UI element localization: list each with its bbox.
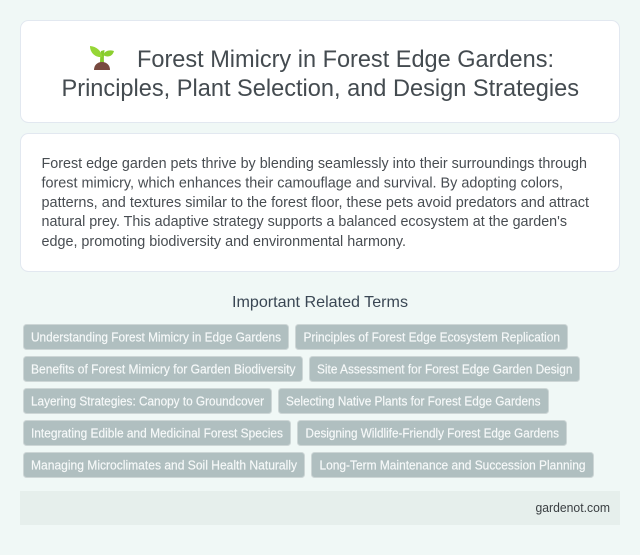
text block: description: natural prey. This adaptive strategy supports a balanced ecosystem at the garden's: [42, 214, 567, 230]
chip: site assessment: Site Assessment for Forest Edge Garden Design: [317, 362, 572, 376]
chip: layering: [24, 388, 272, 414]
panel: title card: [20, 20, 620, 122]
text block: description: Forest edge garden pets thrive by blending seamlessly into their surroundings through: [42, 156, 587, 172]
panel: related term chips: [24, 324, 594, 478]
chip: edible species: Integrating Edible and Medicinal Forest Species: [31, 426, 283, 440]
chip: understanding: [24, 324, 288, 350]
chip: benefits: Benefits of Forest Mimicry for Garden Biodiversity: [31, 362, 296, 376]
chip: native plants: Selecting Native Plants for Forest Edge Gardens: [286, 394, 540, 408]
text block: description: forest mimicry, which enhances their camouflage and survival. By adopting colors,: [42, 175, 563, 191]
heading: related terms: Important Related Terms: [232, 294, 408, 311]
icon: seedling: [90, 46, 114, 70]
text block: description: [42, 156, 589, 250]
title: Principles, Plant Selection, and Design Strategies: [62, 75, 579, 102]
chip: understanding: Understanding Forest Mimicry in Edge Gardens: [31, 330, 281, 344]
chip: microclimates: Managing Microclimates and Soil Health Naturally: [31, 458, 298, 472]
footer source text: gardenot.com: [536, 500, 610, 515]
text block: description: patterns, and textures similar to the forest floor, these pets avoid predators and attract: [42, 195, 589, 211]
chip: microclimates: [24, 452, 304, 478]
footer: [20, 491, 620, 525]
chip: maintenance: Long-Term Maintenance and Succession Planning: [320, 458, 586, 472]
chip: wildlife: Designing Wildlife-Friendly Forest Edge Gardens: [306, 426, 559, 440]
chip: principles: Principles of Forest Edge Ecosystem Replication: [304, 330, 560, 344]
chip: wildlife: [298, 420, 566, 446]
chip: benefits: [24, 356, 302, 382]
chip: native plants: [278, 388, 548, 414]
chip: maintenance: [312, 452, 594, 478]
chip: site assessment: [310, 356, 580, 382]
panel: description card: [20, 134, 620, 272]
chip: edible species: [24, 420, 290, 446]
title: Forest Mimicry in Forest Edge Gardens:: [137, 46, 554, 73]
chip: principles: [296, 324, 568, 350]
title: [62, 46, 579, 102]
text block: description: edge, promoting biodiversity and environmental harmony.: [42, 234, 406, 250]
chip: layering: Layering Strategies: Canopy to Groundcover: [31, 394, 264, 408]
